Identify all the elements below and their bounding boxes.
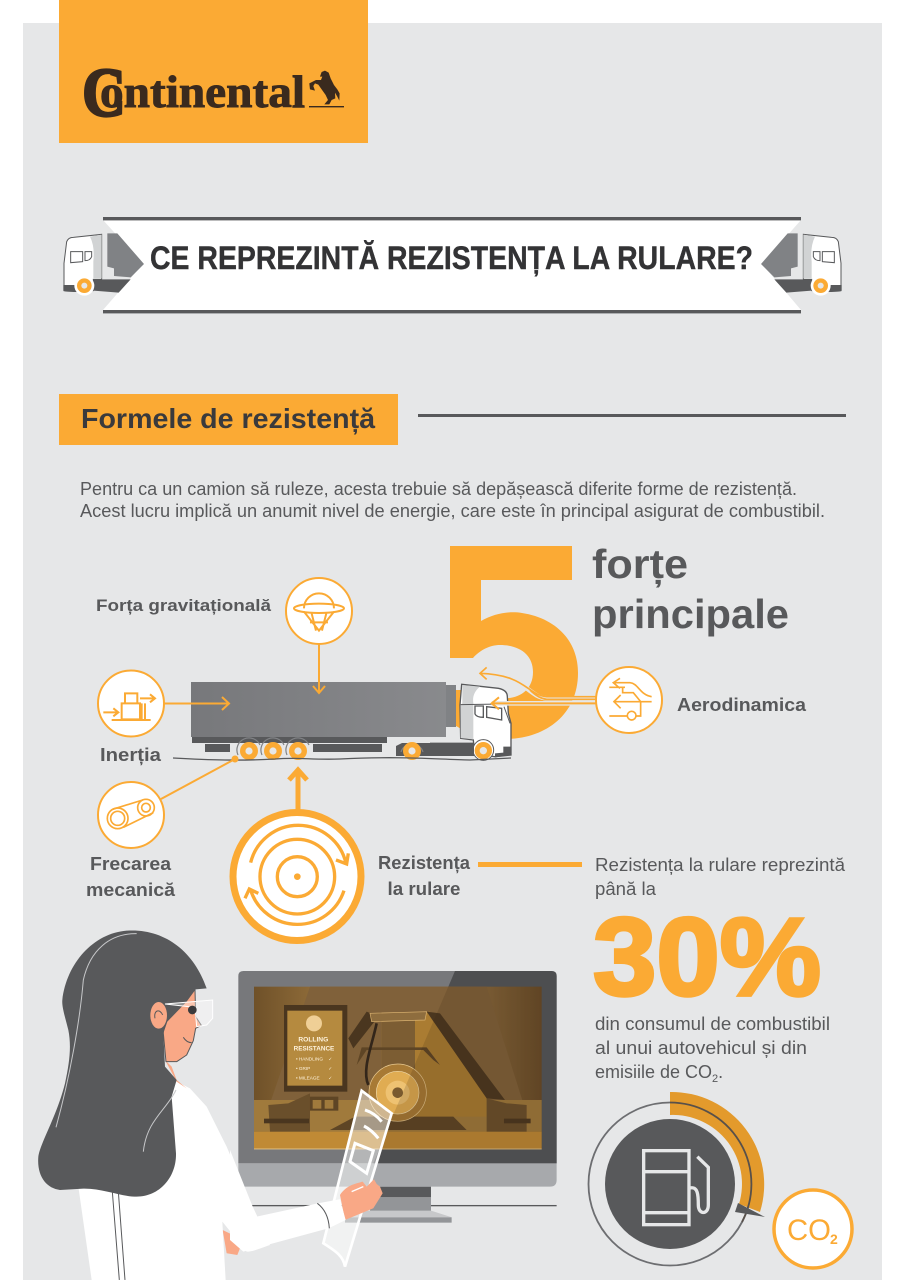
label: gravity: Forța gravitațională [96,596,272,615]
label: inertia: Inerția [100,745,162,765]
intro text: Acest lucru implică un anumit nivel de energie, care este în principal asigurat de combustibil. [80,501,825,521]
arrow: rolling [289,770,307,812]
monitor [238,971,557,1223]
chassis and wheels [237,738,474,760]
screen: poster [284,1005,347,1092]
screen: poster: ✓ [328,1066,332,1071]
ear [150,1002,167,1029]
force: rolling resistance [233,770,582,940]
road line [173,758,511,760]
desk line [252,1205,557,1206]
screen: poster: RESISTANCE [294,1046,335,1053]
label: rolling: la rulare [388,879,460,899]
statistic text: al unui autovehicul și din [595,1038,807,1058]
hair [38,930,207,1197]
icon: CO2 badge: CO [787,1214,831,1247]
section heading: Formele de rezistență [81,403,375,434]
force: inertia [98,670,229,765]
screen: poster: ✓ [328,1057,332,1062]
heading: 5 forces: forțe [592,541,688,587]
force: aerodynamics [480,667,807,733]
big number 5 [450,546,578,739]
arrow: gravity [313,644,325,693]
sleeve [230,1150,346,1252]
label: rolling [378,853,471,899]
truck cab [430,684,511,760]
person [38,930,270,1280]
intro text: Pentru ca un camion să ruleze, acesta trebuie să depășească diferite forme de rezistență. [80,479,797,499]
statistic text: până la [595,879,657,899]
logo header [59,0,368,143]
statistic text: Rezistența la rulare reprezintă [595,855,846,875]
icon: left truck [63,233,144,296]
force: gravity [96,578,352,693]
label: aerodynamics: Aerodinamica [677,695,807,715]
logo: Continental wordmark [82,55,344,132]
screen: poster: ROLLING [298,1037,328,1044]
statistic text: din consumul de combustibil [595,1014,830,1034]
screen: poster: • GRIP [296,1066,310,1071]
statistic text: 2 [712,1073,718,1085]
other hand [223,1230,243,1255]
screen: poster: • HANDLING [296,1057,323,1062]
statistic: 30%: 30% [593,896,821,1019]
title banner [63,217,842,313]
arm and tablet [230,1091,392,1267]
icon: moving box [103,693,155,720]
gauge orange arc [670,1092,764,1212]
fuel gauge [588,1092,852,1268]
icon: CO2 badge: 2 [830,1231,838,1247]
section heading [59,394,846,445]
label: friction [86,854,176,900]
title: CE REPREZINTĂ REZISTENȚA LA RULARE? [150,240,753,276]
statistic text: . [718,1062,723,1082]
icon: parachute [294,593,344,631]
connector: friction [161,759,235,799]
icon: right truck [761,233,842,296]
heading: 5 forces: principale [592,591,789,637]
screen: tyre [369,1064,426,1121]
lab coat [78,1080,270,1280]
arrows: air flow [480,667,597,709]
arrow: inertia [164,697,229,710]
icon: belt and pulleys [107,799,154,829]
screen: poster: ✓ [328,1075,332,1080]
gauge ring [588,1102,752,1266]
monitor body [238,971,557,1187]
icon: rotating tyre [245,825,348,924]
icon: air flow over vehicle [609,678,652,720]
force: mechanical friction [86,756,238,900]
label: rolling: Rezistența [378,853,471,873]
truck diagram [173,682,511,760]
logo: Continental wordmark: ontinental [100,66,305,117]
screen reflection [378,987,542,1149]
monitor stand [345,1187,452,1223]
screen: tyre test scene [254,987,542,1149]
statistic text [593,855,846,1085]
eye [188,1006,197,1014]
screen: poster: • MILEAGE [296,1075,320,1080]
icon: fuel pump [644,1151,708,1225]
trailer [191,682,456,752]
icon: CO2 badge [774,1190,852,1268]
label: friction: Frecarea [90,854,172,874]
safety glasses [165,1000,213,1027]
intro text [80,479,825,521]
transparent tablet [323,1091,392,1267]
heading: 5 forces [592,541,789,637]
neck and face [163,988,201,1088]
label: friction: mecanică [86,880,176,900]
statistic text: emisiile de CO [595,1062,712,1082]
hand [340,1179,383,1220]
logo: Continental wordmark: C [82,55,126,132]
gauge pointer [735,1203,765,1217]
